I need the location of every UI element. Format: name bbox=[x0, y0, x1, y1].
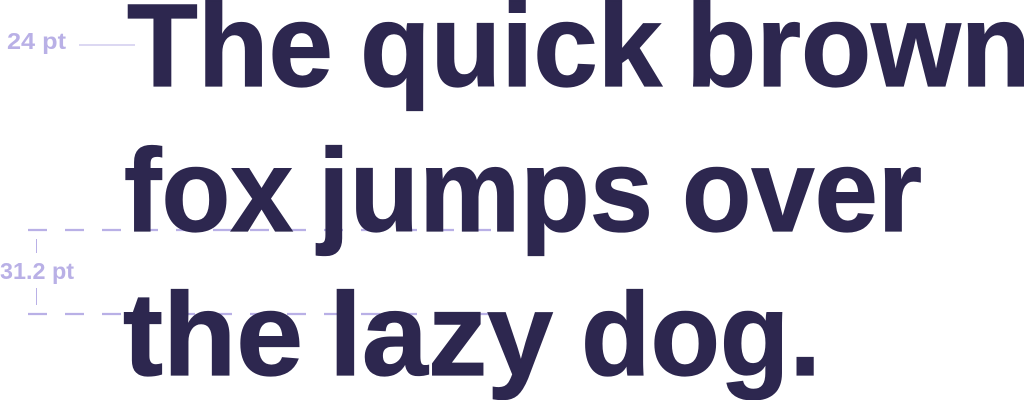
sample text: line 2 bbox=[124, 125, 922, 257]
sample text: line 1 bbox=[127, 0, 1024, 112]
sample text: line 3: the bbox=[123, 269, 303, 400]
font size label: 24 pt: 24 pt bbox=[7, 28, 66, 54]
line height bracket: upper segment bbox=[36, 239, 38, 253]
line height guide: upper dashed line bbox=[28, 229, 493, 231]
sample text: line 3 bbox=[123, 269, 821, 400]
font size leader line bbox=[79, 44, 135, 46]
sample text: line 3: dog. bbox=[581, 269, 821, 400]
sample text: line 3: lazy bbox=[329, 269, 553, 400]
line height guide: lower dashed line bbox=[28, 313, 493, 315]
line height label: 31.2 pt: 31.2 pt bbox=[0, 258, 74, 284]
sample text: line 2: fox bbox=[124, 125, 293, 257]
sample text: line 2: jumps bbox=[316, 125, 653, 257]
sample text: line 2: over bbox=[682, 125, 922, 257]
line height bracket: lower segment bbox=[36, 288, 38, 305]
